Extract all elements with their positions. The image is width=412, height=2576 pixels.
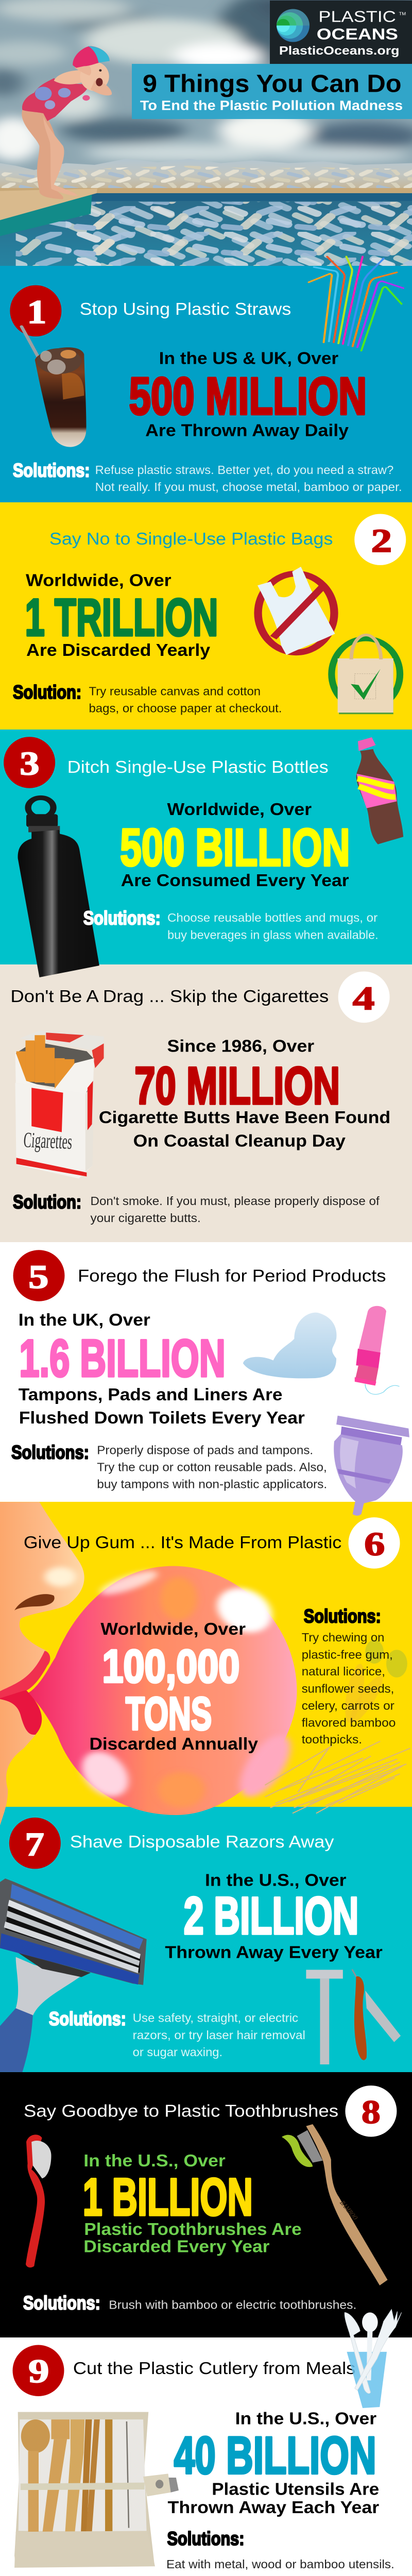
- stat outro: [168, 2480, 379, 2517]
- icon: cigarette pack: [15, 1030, 104, 1178]
- number badge 5: 5: [28, 1258, 48, 1296]
- stat outro: Are Consumed Every Year: [121, 871, 349, 890]
- icon: face nose: [0, 1502, 84, 1825]
- stat intro: Worldwide, Over: [100, 1620, 246, 1639]
- solutions label: Solutions:: [11, 1442, 89, 1463]
- icon: banned plastic bag: [258, 567, 335, 655]
- number badge 4: 4: [353, 980, 375, 1017]
- icon: disposable razor: [0, 1878, 147, 2072]
- stat intro: In the U.S., Over: [83, 2151, 226, 2171]
- icon: iced drink with metal straw: [22, 327, 87, 447]
- sky with clouds: [0, 0, 412, 162]
- heading: Say Goodbye to Plastic Toothbrushes: [24, 2102, 338, 2121]
- stat unit: TONS: [126, 1688, 212, 1739]
- number badge 1: [10, 285, 61, 336]
- number badge 5: [13, 1250, 65, 1301]
- icon: cigarette pack: Cigarettes: [23, 1128, 73, 1154]
- title banner: [132, 64, 412, 119]
- solutions text: Try the cup or cotton reusable pads. Also,: [97, 1460, 327, 1474]
- solutions text: [97, 1443, 327, 1491]
- number badge 2: [354, 514, 406, 565]
- icon: plastic cutlery in cup: [345, 2310, 402, 2408]
- heading: Give Up Gum ... It's Made From Plastic: [24, 1533, 341, 1552]
- stat intro: In the U.S., Over: [205, 1871, 346, 1890]
- solution label: Solution:: [13, 682, 81, 703]
- stat outro: Tampons, Pads and Liners Are: [19, 1385, 282, 1404]
- icon: bamboo toothbrush: [282, 2124, 388, 2285]
- stat outro: [83, 2220, 302, 2256]
- stat intro: In the U.S., Over: [235, 2410, 376, 2428]
- stat intro: In the UK, Over: [19, 1311, 150, 1330]
- solutions text: [133, 2011, 305, 2059]
- icon: safety razor: [306, 1970, 343, 2064]
- number badge 9: [12, 2345, 64, 2396]
- icon: sanitary pad: [243, 1313, 337, 1378]
- icon: menstrual cup: [334, 1416, 409, 1516]
- number badge 9: 9: [28, 2353, 49, 2390]
- panel 1: plastic straws: [0, 257, 412, 502]
- icon: red plastic toothbrush: [26, 2134, 51, 2267]
- solution text: [91, 1194, 380, 1225]
- stat outro: Discarded Annually: [89, 1735, 258, 1754]
- swimming pool: [0, 188, 412, 268]
- logo box: [270, 1, 412, 64]
- solutions text: Try chewing on: [302, 1631, 384, 1644]
- icon: bamboo utensil roll: [14, 2412, 179, 2568]
- solutions text: toothpicks.: [302, 1733, 362, 1746]
- solutions text: or sugar waxing.: [133, 2045, 222, 2059]
- panel 5: period products: [0, 1242, 412, 1516]
- stat number: 1 TRILLION: [25, 588, 218, 647]
- panel 8: toothbrushes: [0, 2072, 412, 2337]
- stat outro: [99, 1108, 390, 1150]
- number badge 8: 8: [362, 2093, 381, 2130]
- solutions text: [302, 1631, 396, 1746]
- number badge 4: [338, 972, 390, 1023]
- heading: Cut the Plastic Cutlery from Meals: [73, 2359, 355, 2378]
- solution text: Try reusable canvas and cotton: [89, 684, 261, 698]
- stat outro: On Coastal Cleanup Day: [133, 1132, 346, 1150]
- number badge 2: 2: [371, 522, 392, 559]
- solution text: [89, 684, 282, 715]
- stat number: 100,000: [102, 1640, 239, 1692]
- number badge 6: 6: [364, 1526, 385, 1563]
- heading: Stop Using Plastic Straws: [80, 300, 291, 319]
- solutions text: buy tampons with non-plastic applicators.: [97, 1477, 327, 1491]
- solutions text: natural licorice,: [302, 1665, 385, 1678]
- stat number: 1.6 BILLION: [19, 1329, 226, 1388]
- heading: Don't Be A Drag ... Skip the Cigarettes: [10, 987, 329, 1006]
- trademark: TM: [399, 11, 406, 16]
- stat outro: Discarded Every Year: [83, 2238, 269, 2256]
- solutions text: [95, 463, 402, 494]
- stat outro: Are Thrown Away Daily: [145, 421, 349, 440]
- bottle pile on horizon: [0, 159, 412, 188]
- icon: bamboo toothpicks: [265, 1741, 410, 1813]
- child on the pool edge: [22, 46, 112, 199]
- number badge 7: 7: [25, 1826, 44, 1863]
- stat outro: [19, 1385, 305, 1428]
- hero photo panel: [0, 0, 412, 268]
- logo mark: [277, 9, 310, 42]
- icon: cola bottle: [356, 737, 403, 844]
- icon: bamboo toothbrush: BAMBOO: [338, 2200, 360, 2221]
- icon: plastic straws: [308, 257, 403, 351]
- icon: black reusable bottle: [18, 798, 99, 977]
- solutions text: Use safety, straight, or electric: [133, 2011, 298, 2025]
- icon: tampon: [355, 1306, 400, 1394]
- solution label: Solution:: [13, 1192, 81, 1213]
- heading: Ditch Single-Use Plastic Bottles: [67, 758, 329, 777]
- icon: canvas tote with check: [332, 635, 400, 714]
- stat outro: Are Discarded Yearly: [26, 641, 211, 660]
- panel 4: cigarettes: [0, 964, 412, 1242]
- heading: Say No to Single-Use Plastic Bags: [49, 530, 333, 548]
- number badge 3: [4, 737, 55, 788]
- icon: straight razor: [352, 1970, 401, 2060]
- solutions label: Solutions:: [49, 2009, 126, 2030]
- panel 7: disposable razors: [0, 1807, 412, 2072]
- solutions text: [167, 911, 379, 942]
- number badge 8: [345, 2086, 397, 2137]
- icon: pink bubble gum: [28, 1566, 301, 1815]
- stat intro: In the US & UK, Over: [159, 349, 338, 368]
- solutions label: Solutions:: [23, 2293, 100, 2314]
- solution text: bags, or choose paper at checkout.: [89, 701, 282, 715]
- solutions label: Solutions:: [13, 460, 90, 481]
- panel 6: chewing gum: [0, 1502, 412, 1825]
- number badge 6: [349, 1517, 400, 1569]
- stat intro: Worldwide, Over: [167, 800, 312, 819]
- stat outro: Flushed Down Toilets Every Year: [19, 1409, 305, 1428]
- icon: lips: [0, 1651, 50, 1735]
- number badge 7: [9, 1818, 61, 1869]
- panel 9: plastic cutlery: [0, 2310, 412, 2576]
- stat outro: Plastic Toothbrushes Are: [84, 2220, 302, 2239]
- solutions text: Properly dispose of pads and tampons.: [97, 1443, 313, 1456]
- stat intro: Worldwide, Over: [26, 571, 171, 590]
- solution text: your cigarette butts.: [91, 1211, 201, 1225]
- solutions text: razors, or try laser hair removal: [133, 2028, 305, 2042]
- panel 3: plastic bottles: [0, 730, 412, 977]
- heading: Shave Disposable Razors Away: [70, 1833, 334, 1852]
- icon: carrots: [341, 1640, 407, 1725]
- stat intro: Since 1986, Over: [167, 1037, 314, 1056]
- number badge 3: 3: [20, 745, 40, 782]
- solutions label: Solutions:: [167, 2529, 244, 2549]
- number badge 1: 1: [27, 293, 46, 330]
- solutions label: Solutions:: [83, 908, 161, 929]
- panel 2: plastic bags: [0, 502, 412, 730]
